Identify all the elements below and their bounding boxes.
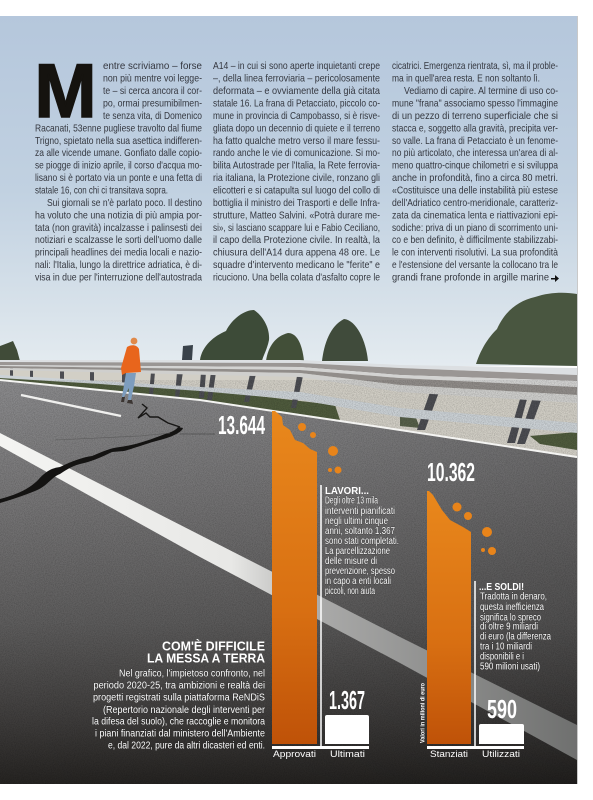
article text: column 2: gliata dopo un decennio di quiete e il terreno [213, 122, 380, 134]
article text: column 3: no più articolato, che interessa un'area di al- [392, 147, 558, 159]
article text: column 2: si», si lasciano scappare lui e Fabio Ceciliano, [213, 222, 380, 234]
heading: com'è difficile la messa a terra: LA MESSA A TERRA [147, 652, 265, 666]
callout: e soldi: tra i 10 miliardi [480, 642, 532, 652]
guardrail [0, 360, 577, 444]
value label 13.644: 13.644 [218, 410, 265, 440]
axis label: stanziati: Stanziati [430, 749, 468, 760]
lane dash [21, 395, 121, 416]
bar: utilizzati [479, 724, 524, 744]
chart: interventi approvati vs ultimati [218, 410, 369, 760]
article text: column 3: anche in profondità, fino a circa 80 metri. [392, 172, 558, 184]
article text: column 2: –, della linea ferroviaria – pericolosamente [213, 73, 380, 85]
icon: continuation arrow [551, 275, 559, 282]
intro text block: periodo 2020-25, tra ambizioni e realtà dei [94, 680, 265, 692]
article text: column 2: bilita Autostrade per l'Italia, la Rete ferrovia- [213, 160, 380, 172]
article text: column 1 [35, 60, 202, 284]
intro text block: Nel grafico, l'impietoso confronto, nel [119, 668, 265, 680]
article text: column 2: statale 16. La frana di Petacciato, piccolo co- [213, 98, 380, 110]
article text: column 1: nali: l'Italia, lungo la direttrice adriatica, è di- [35, 259, 202, 271]
trees [0, 293, 577, 366]
callout: lavori: anni, soltanto 1.367 [325, 526, 395, 537]
bar: approvati [272, 411, 317, 744]
article text: column 2: il capo della Protezione civile. In realtà, la [213, 234, 380, 246]
article text: column 1: Trigno, spietato nella sua asettica indifferen- [35, 135, 202, 147]
divider and axis [474, 581, 476, 746]
article text: column 2: ricuciono. Una bella colata d'asfalto copre le [213, 272, 380, 284]
article text: column 3: grandi frane profonde in argille marine [392, 272, 549, 284]
callout: e soldi: 590 milioni usati) [480, 662, 540, 672]
article text: column 2 [213, 60, 380, 284]
bar: stanziati [427, 491, 471, 744]
callout: lavori: interventi pianificati [325, 506, 395, 517]
callout: e soldi: ...E SOLDI! [479, 581, 524, 593]
intro text block [92, 668, 266, 752]
callout: e soldi: di oltre 9 miliardi [480, 622, 538, 632]
callout: lavori: Degli oltre 13 mila [325, 496, 378, 506]
verge behind guardrail [0, 368, 577, 458]
intro text block: e, dal 2022, pure da altri dicasteri ed enti. [108, 740, 265, 752]
article text: column 3: ma in quell'area resta. E non soltanto lì. [392, 73, 540, 85]
article text: column 1: principali headlines dei media locali e nazio- [35, 247, 202, 259]
intro text block: la difesa del suolo), che raccoglie e monitora [92, 716, 265, 728]
article text: column 1: za alle vicende umane. Gonfiato dalle copio- [35, 147, 202, 159]
article text: column 2: deformata – e ovviamente della già citata [213, 85, 380, 97]
callout: e soldi: questa inefficienza [480, 602, 544, 613]
callout: lavori: La parcellizzazione [325, 546, 390, 557]
sky [0, 16, 577, 366]
road sign [182, 345, 193, 360]
wide white stripe [0, 433, 577, 760]
article text: column 3: co e ben definito, è difficilmente stabilizzabi- [392, 234, 558, 246]
article text: column 3: Vediamo di capire. Al termine di uso co- [404, 85, 558, 97]
callout: e soldi: disponibili e i [480, 652, 524, 662]
axis label: ultimati: Ultimati [330, 749, 365, 760]
article text: column 3: mune "frana" associamo spesso l'immagine [392, 98, 558, 110]
callout: e soldi [479, 581, 551, 672]
article text: column 3: di un pezzo di terreno superficiale che si [392, 110, 558, 122]
callout: lavori: prevenzione, spesso [325, 566, 395, 577]
callout: e soldi: significa lo spreco [480, 612, 541, 624]
callout: lavori: in capo a enti locali [325, 576, 391, 587]
axis label: utilizzati: Utilizzati [482, 749, 520, 760]
heading: com'è difficile la messa a terra [147, 638, 265, 666]
unit label: Valori in milioni di euro [420, 683, 426, 743]
crumbling fragments [298, 423, 342, 474]
worker in orange jacket [121, 338, 141, 404]
callout: lavori: delle misure di [325, 556, 377, 567]
callout: lavori: LAVORI... [325, 485, 369, 497]
callout: lavori: piccoli, non aiuta [325, 586, 375, 597]
article text: column 3: «Costituisce una delle instabilità più estese [392, 184, 558, 196]
article text: column 3: le con interventi risolutivi. La sua profondità [392, 247, 558, 259]
article text: column 1: notiziari e scalzasse le sorti dell'uomo dalle [35, 234, 202, 246]
bar: ultimati [325, 715, 369, 744]
intro text block: progetti registrati sulla piattaforma ReNDiS [93, 692, 265, 704]
article text: column 2: elicotteri e si catapulta sul luogo del collo di [213, 184, 380, 196]
callout: lavori: sono stati completati. [325, 536, 399, 547]
crumbling fragments [452, 502, 496, 555]
article text: column 3: zata da cinematica lenta e riattivazioni epi- [392, 209, 558, 221]
article text: column 1: visa in due per l'interruzione dell'autostrada [35, 272, 202, 284]
article text: column 3: dell'Adriatico centro-meridionale, caratteriz- [392, 197, 558, 209]
article text: column 1: po, ormai presumibilmen- [103, 98, 202, 110]
crack [0, 427, 183, 503]
article text: column 2: rando anche le vie di comunicazione. Si mo- [213, 147, 380, 159]
heading: com'è difficile la messa a terra: COM'È DIFFICILE [162, 638, 265, 654]
article text: column 1: lisano si è portato via un ponte e una fetta di [35, 172, 202, 184]
article text: column 2: ria italiana, la Protezione civile, ronzano gli [213, 172, 380, 184]
callout: lavori: negli ultimi cinque [325, 516, 388, 527]
article text: column 2: squadre d'intervento medicano le "ferite" e [213, 259, 380, 271]
article text: column 3: stacca e, soggetto alla gravità, precipita ver- [392, 122, 558, 134]
article text: column 3: meno quattro-cinque chilometri e si sviluppa [392, 160, 558, 172]
article text: column 1: entre scriviamo – forse [103, 60, 202, 72]
callout: e soldi: Tradotta in denaro, [480, 592, 547, 602]
callout: e soldi: di euro (la differenza [480, 632, 551, 642]
article text: column 1: tata (non gravità) incalzasse i palinsesti dei [35, 222, 202, 234]
chart: fondi stanziati vs utilizzati [420, 457, 524, 760]
intro text block: (Repertorio nazionale degli interventi per [103, 705, 266, 716]
value label 1.367: 1.367 [329, 685, 365, 715]
value label 10.362: 10.362 [427, 457, 475, 487]
article text: column 1: te senza vita, di Domenico [103, 110, 202, 122]
article text: column 1: Sui giornali se n'è parlato poco. Il destino [47, 197, 202, 209]
article text: column 2: ha fatto qualche metro verso il mare fessu- [213, 135, 380, 147]
right page edge shadow [577, 16, 578, 784]
article text: column 1: te – si cerca ancora il cor- [103, 85, 202, 97]
article text: column 2: strutture, Matteo Salvini. «Potrà durare me- [213, 209, 380, 221]
article text: column 1: non più mentre voi legge- [103, 73, 202, 85]
article text: column 3 [392, 60, 559, 284]
asphalt [0, 380, 577, 784]
article text: column 2: bottiglia il ministro dei Trasporti e delle Infra- [213, 197, 380, 209]
callout: lavori [325, 485, 399, 597]
article text: column 1: Racanati, 53enne pugliese travolto dal fiume [35, 122, 202, 134]
article text: column 1: statale 16, con chi ci transitava sopra. [35, 184, 168, 196]
article text: column 2: A14 – in cui si sono aperte inquietanti crepe [213, 60, 380, 72]
axis label: approvati: Approvati [273, 749, 316, 760]
vegetation strip [0, 377, 340, 420]
article text: column 2: chiusura dell'A14 dura appena 48 ore. Le [213, 247, 380, 259]
intro text block: i piani finanziati dal ministero dell'Ambiente [95, 728, 265, 740]
article text: column 1: se piogge di inizio aprile, il corso d'acqua mo- [35, 160, 202, 172]
article text: column 1: ha voluto che una notizia di più ampia por- [35, 209, 202, 221]
divider and axis [272, 485, 369, 748]
article text: column 2: mune in provincia di Campobasso, si è risve- [213, 110, 380, 122]
road edge line [0, 380, 577, 457]
drop cap M: M [34, 49, 96, 134]
value label 590: 590 [487, 694, 517, 724]
